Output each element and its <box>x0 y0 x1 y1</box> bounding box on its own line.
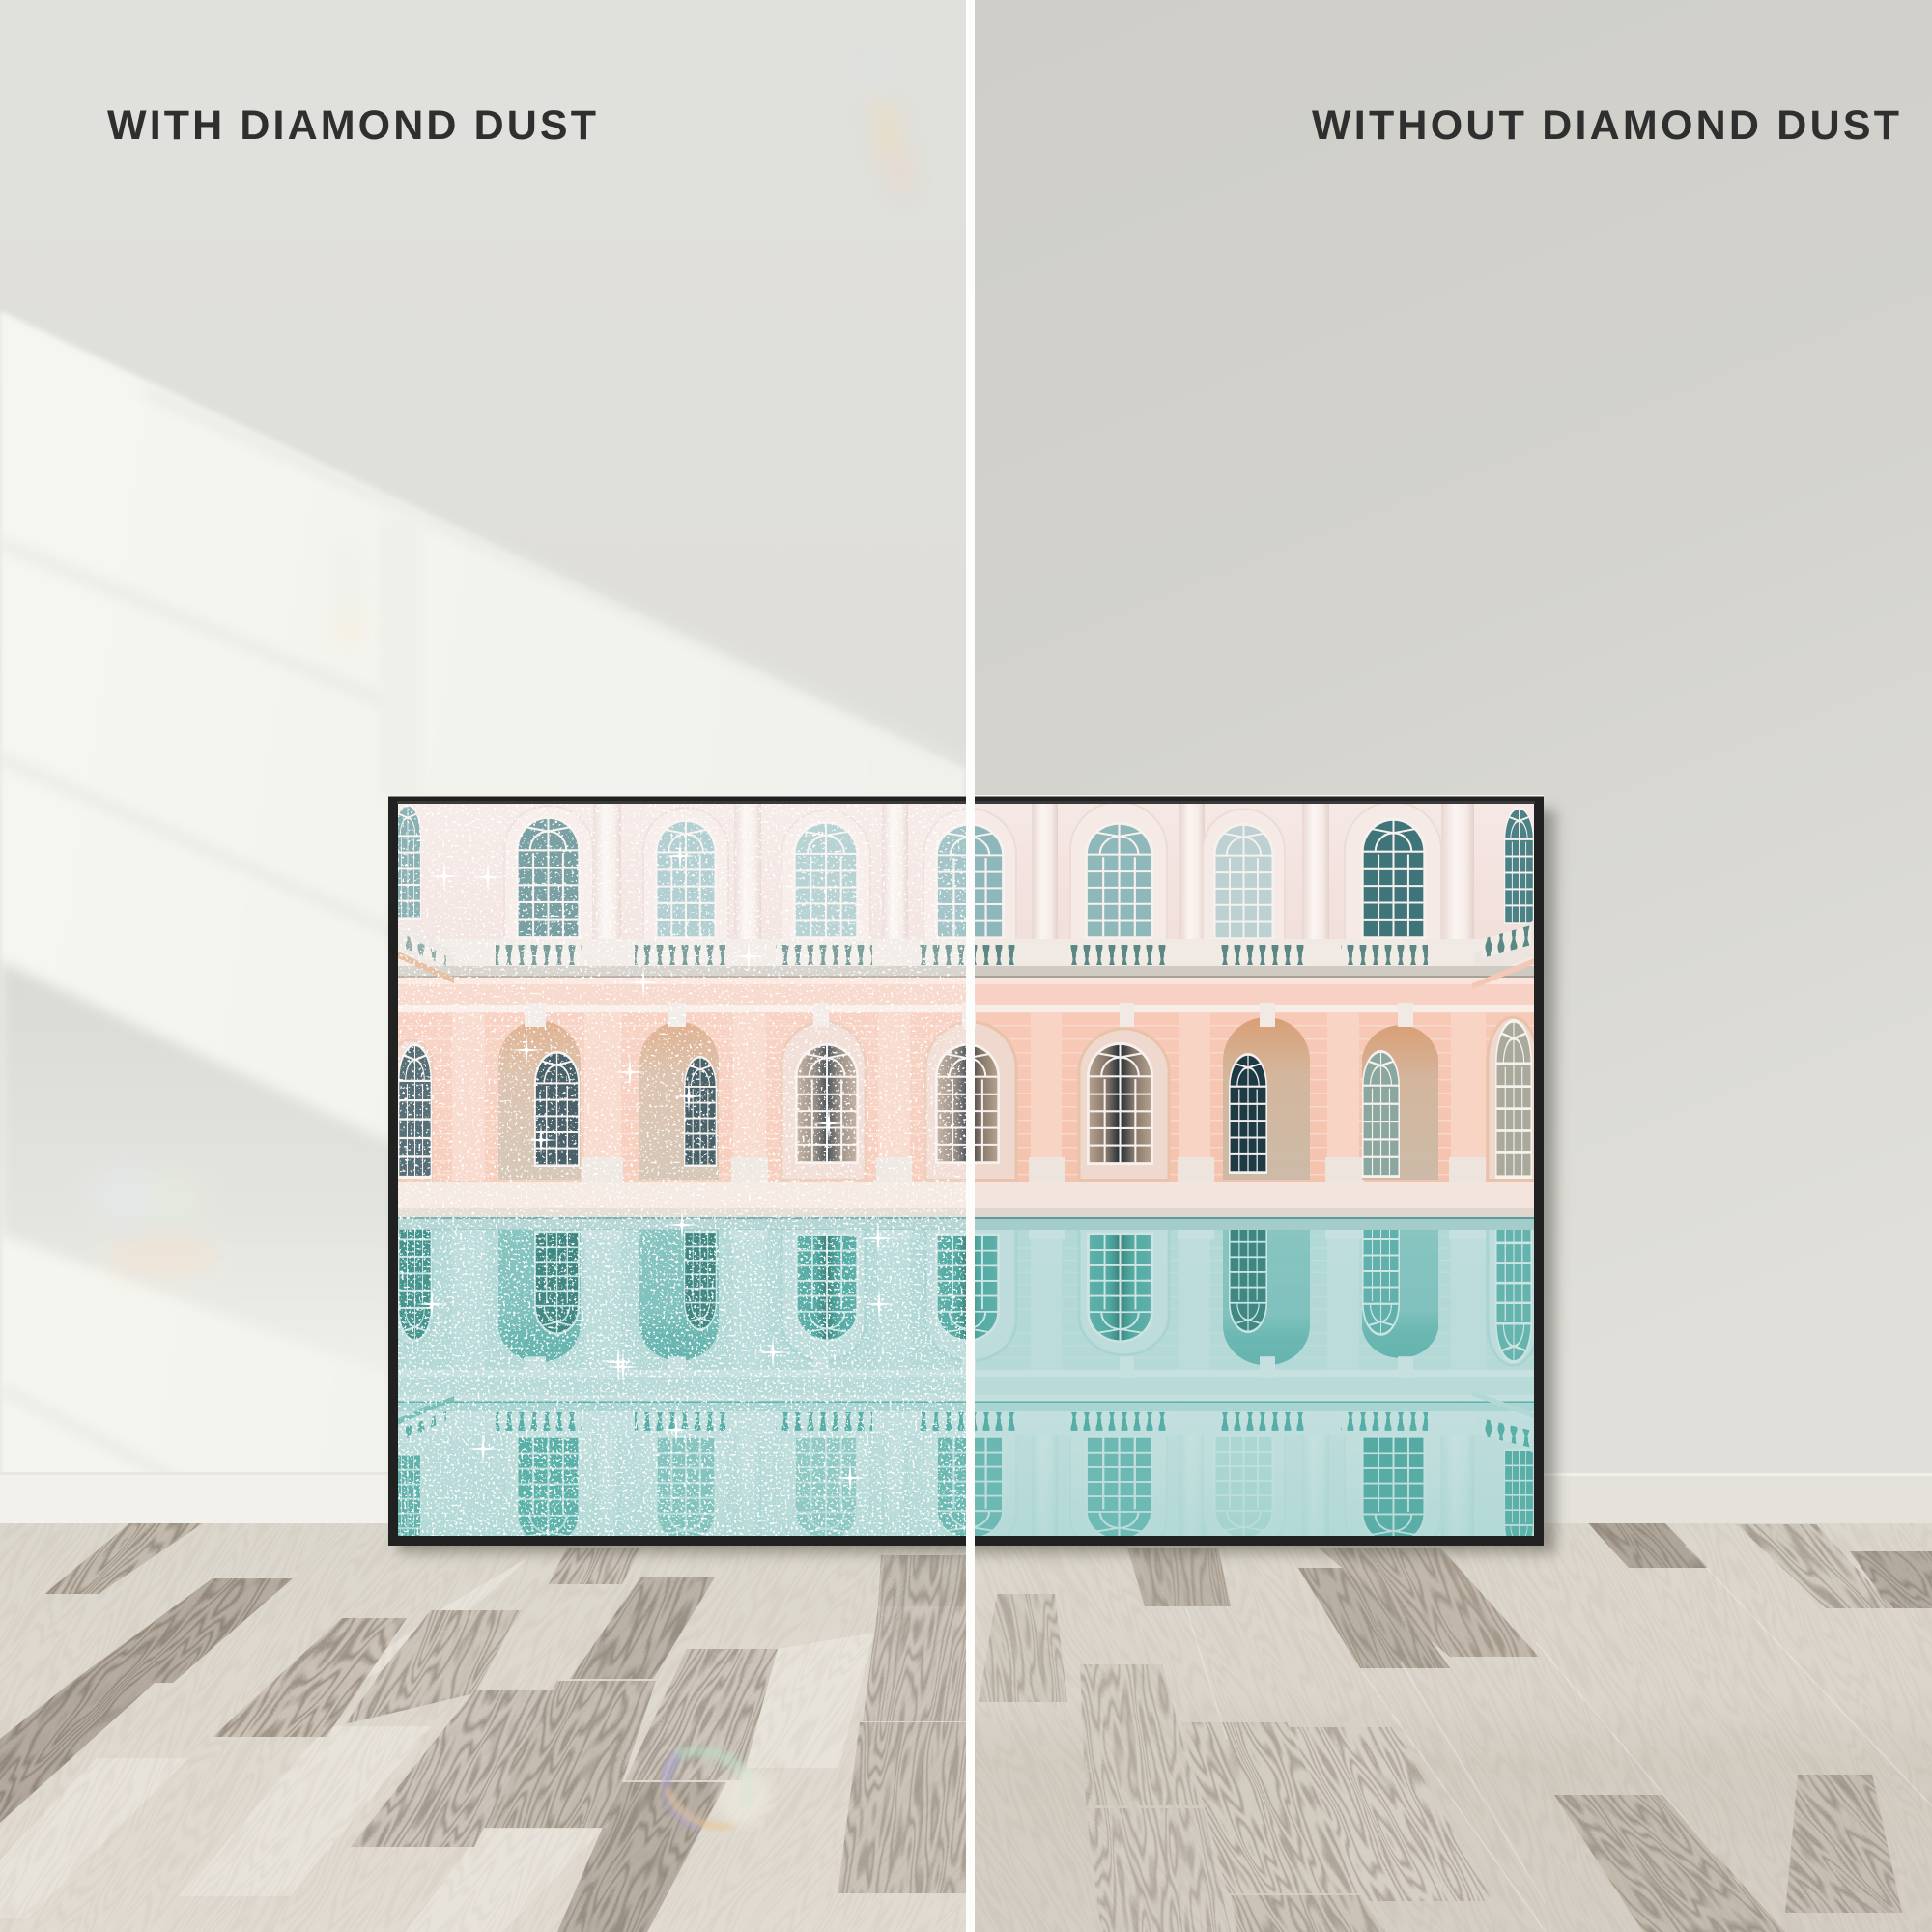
frame shadow <box>398 810 1555 1553</box>
baseboards <box>0 1472 1932 1523</box>
balusters <box>406 925 1531 966</box>
painting: palace and pool <box>390 802 1538 1559</box>
prism rainbow: middle of wall <box>328 536 365 651</box>
divider <box>966 0 975 1932</box>
pilaster bases <box>582 1157 1486 1186</box>
picture frame <box>388 795 1544 1546</box>
palace building <box>390 802 1538 1186</box>
right wall <box>974 0 1932 1523</box>
window shadow band <box>0 961 406 1381</box>
prism rainbow: top of wall <box>856 43 916 200</box>
floor left <box>0 1523 966 1932</box>
prism rainbow: floor <box>665 1751 771 1827</box>
heading: without diamond dust: WITHOUT DIAMOND DUST <box>1312 102 1899 149</box>
pool water <box>398 1401 1534 1402</box>
arched window surrounds <box>390 1017 1538 1180</box>
vertical shadow band <box>379 517 423 802</box>
left wall <box>0 0 966 1523</box>
balcony <box>398 920 1534 978</box>
thin shadow lines <box>0 391 966 1523</box>
wood grain right <box>974 1523 1932 1932</box>
walkway <box>398 1182 1534 1230</box>
open arches <box>498 1017 1438 1180</box>
prism rainbow: lower wall <box>91 1164 217 1273</box>
pool reflection <box>390 1213 1538 1559</box>
sunlight patch <box>0 311 966 1523</box>
lower pilasters <box>452 1012 1486 1181</box>
darker planks <box>979 1523 1932 1932</box>
lower storey wall <box>398 1012 1534 1186</box>
glitter specks <box>398 804 968 1536</box>
pale planks <box>0 1555 874 1932</box>
plank seams <box>1186 1546 1932 1932</box>
heading: with diamond dust: WITH DIAMOND DUST <box>107 102 596 149</box>
white wash <box>398 804 968 1229</box>
floor right <box>974 1523 1932 1932</box>
lower windows <box>398 1019 1532 1179</box>
sparkle stars <box>415 839 895 1494</box>
upper storey wall <box>398 804 1534 944</box>
upper windows <box>394 804 1534 940</box>
diamond dust side wash and glitter <box>398 804 968 1536</box>
water tint <box>398 1230 1534 1536</box>
upper window surrounds <box>504 802 1441 942</box>
darker planks <box>0 1523 966 1932</box>
entablature <box>398 952 1534 1014</box>
upper columns <box>593 804 1474 942</box>
keystones <box>525 1003 1413 1027</box>
wood grain left <box>0 1523 966 1932</box>
